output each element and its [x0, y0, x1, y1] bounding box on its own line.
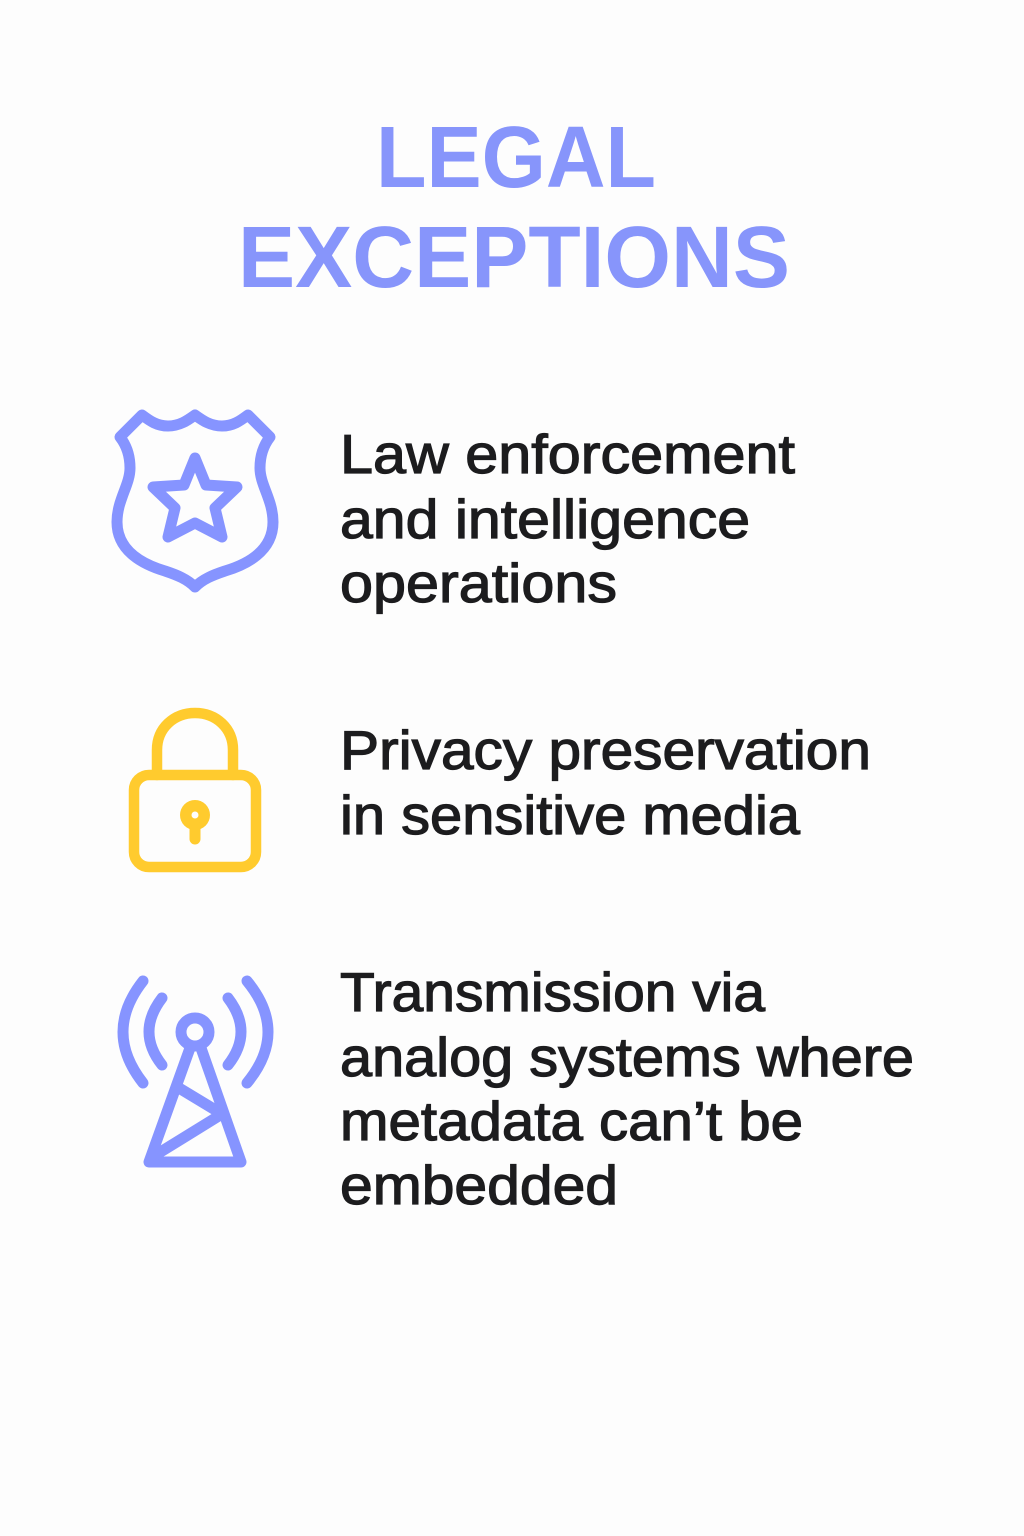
- text: analog transmission: analog systems where: [340, 1026, 914, 1088]
- title: LEGAL: [376, 109, 656, 206]
- text: privacy preservation: [340, 719, 871, 846]
- text: analog transmission: Transmission via: [340, 961, 765, 1023]
- text: analog transmission: metadata can’t be: [340, 1090, 803, 1152]
- text: law enforcement: [340, 423, 795, 614]
- text: privacy preservation: in sensitive media: [340, 784, 800, 846]
- text: law enforcement: operations: [340, 552, 617, 614]
- text: privacy preservation: Privacy preservation: [340, 719, 871, 781]
- text: analog transmission: [340, 961, 914, 1216]
- title: EXCEPTIONS: [238, 209, 790, 306]
- title: [238, 109, 790, 306]
- panel: law enforcement exception: [117, 415, 795, 614]
- icon: police badge with star: [117, 415, 273, 587]
- text: law enforcement: and intelligence: [340, 488, 750, 550]
- panel: privacy exception: [134, 713, 871, 867]
- text: analog transmission: embedded: [340, 1154, 618, 1216]
- text: law enforcement: Law enforcement: [340, 423, 795, 485]
- panel: analog transmission exception: [123, 961, 914, 1216]
- icon: radio tower: [123, 981, 268, 1162]
- icon: padlock: [134, 713, 256, 867]
